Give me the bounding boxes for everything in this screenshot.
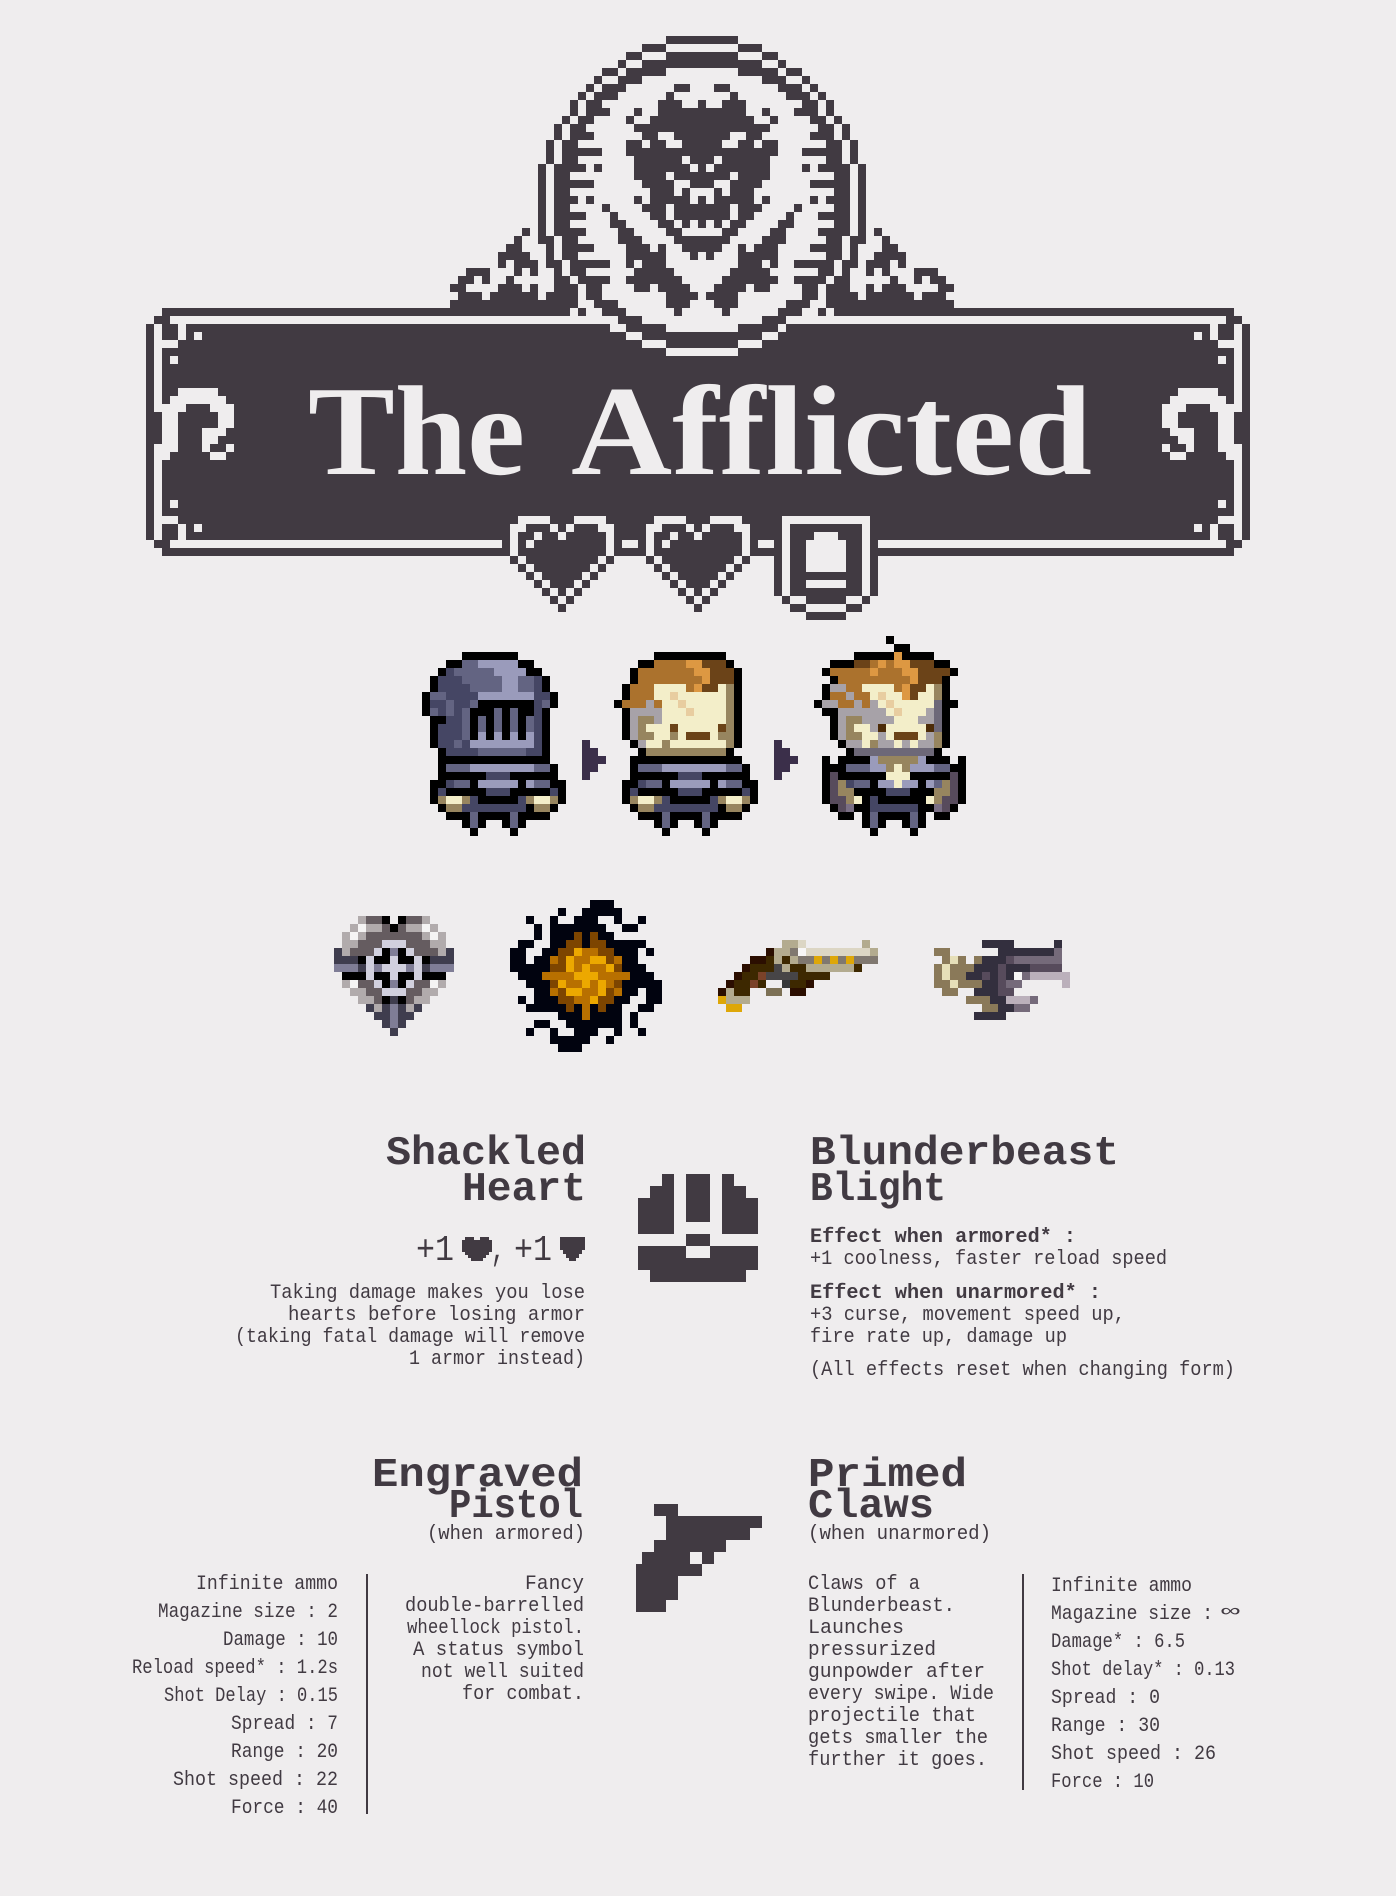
stats: engraved pistol: Shot Delay : 0.15 — [164, 1685, 338, 1708]
text: primed claws description: projectile that — [808, 1705, 976, 1728]
stats: primed claws: Infinite ammo — [1051, 1575, 1192, 1598]
stats: engraved pistol: Force : 40 — [231, 1797, 338, 1820]
stats: engraved pistol: Infinite ammo — [196, 1573, 338, 1596]
icon: gun silhouette — [636, 1504, 762, 1612]
text: effect when armored — [810, 1226, 1167, 1271]
panel: primed claws heading — [808, 1453, 991, 1546]
text: shackled heart effect: (taking fatal damage will remove — [235, 1326, 585, 1349]
stats: primed claws: Range : 30 — [1051, 1715, 1160, 1738]
text: shackled heart effect: 1 armor instead) — [409, 1348, 585, 1371]
stats: engraved pistol: Magazine size : 2 — [158, 1601, 338, 1624]
title text: Afflicted — [571, 360, 1092, 502]
character sprite: blighted form — [814, 640, 966, 832]
heading: Shackled Heart — [386, 1131, 586, 1213]
stats: primed claws — [1051, 1575, 1240, 1794]
stats: primed claws: ∞ — [1221, 1603, 1240, 1622]
panel: engraved pistol heading — [372, 1453, 585, 1546]
text: engraved pistol description: for combat. — [462, 1683, 584, 1706]
stats: primed claws: Shot speed : 26 — [1051, 1743, 1216, 1766]
stats: primed claws: Damage* : 6.5 — [1051, 1631, 1185, 1654]
item icon: primed claws — [934, 944, 1070, 1016]
text: effect when unarmored: fire rate up, damage up — [810, 1326, 1067, 1349]
panel: engraved pistol heading: Pistol — [449, 1484, 583, 1530]
text: shackled heart effect — [235, 1282, 585, 1371]
text: effect when unarmored: Effect when unarmored* : — [810, 1282, 1101, 1305]
panel: primed claws heading: Primed — [808, 1453, 967, 1499]
crest: demon emblem and banner frame — [146, 40, 1250, 552]
arrow — [582, 740, 606, 780]
stats: primed claws: Spread : 0 — [1051, 1687, 1160, 1710]
title text — [308, 360, 1092, 502]
panel: engraved pistol heading: Engraved — [372, 1453, 583, 1499]
stats: engraved pistol: Range : 20 — [231, 1741, 338, 1764]
section: shackled heart and blunderbeast blight — [235, 1131, 1235, 1382]
arrow — [774, 740, 798, 780]
text: primed claws description: pressurized — [808, 1639, 936, 1662]
panel: engraved pistol heading: (when armored) — [427, 1523, 585, 1546]
title banner — [146, 40, 1250, 616]
note: effects reset: (All effects reset when changing form) — [810, 1359, 1235, 1382]
section: weapons — [132, 1453, 1240, 1820]
text: primed claws description: Blunderbeast. — [808, 1595, 955, 1618]
heading: Blunderbeast Blight — [810, 1131, 1119, 1213]
stats: primed claws: Force : 10 — [1051, 1771, 1154, 1794]
icons: two hearts and armor under banner — [502, 520, 878, 616]
title text: The — [308, 360, 525, 502]
stats: engraved pistol: Shot speed : 22 — [173, 1769, 338, 1792]
stat line: plus one heart, plus one armor: , — [491, 1230, 505, 1271]
panel: blunderbeast blight description — [810, 1131, 1235, 1382]
panel: shackled heart description — [235, 1131, 586, 1371]
stats: engraved pistol: Spread : 7 — [231, 1713, 338, 1736]
text: effect when unarmored — [810, 1282, 1125, 1349]
panel: primed claws heading: (when unarmored) — [808, 1523, 991, 1546]
text: primed claws description: gunpowder after — [808, 1661, 985, 1684]
heading: Blunderbeast Blight: Blunderbeast — [810, 1131, 1119, 1177]
text: effect when armored: Effect when armored* : — [810, 1226, 1076, 1249]
text: engraved pistol description: not well suited — [421, 1661, 584, 1684]
text: engraved pistol description: Fancy — [525, 1573, 584, 1596]
text: primed claws description: further it goes. — [808, 1749, 987, 1772]
stats: engraved pistol: Damage : 10 — [223, 1629, 338, 1652]
panel: primed claws heading: Claws — [808, 1484, 934, 1530]
stats: engraved pistol — [132, 1573, 338, 1820]
text: shackled heart effect: Taking damage makes you lose — [270, 1282, 585, 1305]
heading: Shackled Heart: Shackled — [386, 1131, 586, 1177]
text: primed claws description: every swipe. Wide — [808, 1683, 994, 1706]
text: engraved pistol description: double-barrelled — [405, 1595, 584, 1618]
text: primed claws description: Launches — [808, 1617, 904, 1640]
text: engraved pistol description — [405, 1573, 584, 1706]
item icon: shackled heart — [334, 920, 454, 1032]
icon: armor and heart emblem — [638, 1180, 758, 1276]
character sprite: unarmored man — [614, 656, 758, 832]
stat line: plus one heart, plus one armor: +1 — [416, 1230, 454, 1271]
stat line: plus one heart, plus one armor — [416, 1230, 585, 1271]
stats: primed claws: Shot delay* : 0.13 — [1051, 1659, 1235, 1682]
text: shackled heart effect: hearts before losing armor — [288, 1304, 585, 1327]
text: primed claws description — [808, 1573, 994, 1772]
heading: Blunderbeast Blight: Blight — [810, 1167, 946, 1213]
text: primed claws description: gets smaller the — [808, 1727, 988, 1750]
item icon: blunderbeast blight — [510, 904, 662, 1048]
stats: primed claws: Magazine size : — [1051, 1603, 1213, 1626]
text: engraved pistol description: A status symbol — [413, 1639, 584, 1662]
text: effect when armored: +1 coolness, faster reload speed — [810, 1248, 1167, 1271]
text: effect when unarmored: +3 curse, movement speed up, — [810, 1304, 1125, 1327]
text: primed claws description: Claws of a — [808, 1573, 920, 1596]
stat line: plus one heart, plus one armor: +1 — [514, 1230, 552, 1271]
stats: engraved pistol: Reload speed* : 1.2s — [132, 1657, 338, 1680]
character sprite: armored knight — [422, 656, 566, 832]
item icon: engraved pistol — [718, 944, 878, 1008]
text: engraved pistol description: wheellock pistol. — [407, 1617, 584, 1640]
heading: Shackled Heart: Heart — [462, 1167, 586, 1213]
